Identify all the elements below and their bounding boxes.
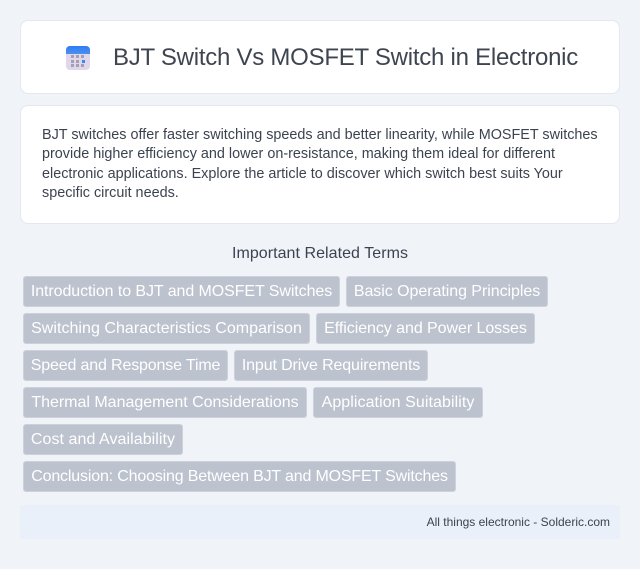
tag: basic operating principles bbox=[346, 276, 548, 307]
tag: switching characteristics: Switching Characteristics Comparison bbox=[31, 320, 302, 337]
tag: introduction: Introduction to BJT and MOSFET Switches bbox=[31, 283, 332, 300]
description text: BJT switches offer faster switching speeds and better linearity, while MOSFET switches bbox=[42, 127, 598, 143]
tag: thermal bbox=[23, 387, 307, 418]
tag: efficiency bbox=[316, 313, 535, 344]
tag: cost bbox=[23, 424, 183, 455]
icon: calendar bbox=[66, 46, 90, 70]
tag: conclusion bbox=[23, 461, 456, 492]
title: BJT Switch Vs MOSFET Switch in Electronic bbox=[113, 44, 578, 71]
tag: input drive: Input Drive Requirements bbox=[242, 357, 420, 374]
footer bar bbox=[20, 505, 620, 539]
tag: input drive bbox=[234, 350, 428, 381]
panel: description card bbox=[20, 105, 620, 224]
tag: switching characteristics bbox=[23, 313, 310, 344]
tag: basic operating principles: Basic Operating Principles bbox=[354, 283, 540, 300]
heading: important related terms: Important Related Terms bbox=[232, 245, 408, 262]
panel: header card bbox=[20, 20, 620, 94]
tag: thermal: Thermal Management Considerations bbox=[31, 394, 299, 411]
tag: introduction bbox=[23, 276, 340, 307]
footer text: All things electronic - Solderic.com bbox=[427, 515, 610, 529]
tag: conclusion: Conclusion: Choosing Between BJT and MOSFET Switches bbox=[31, 468, 448, 485]
tag: speed: Speed and Response Time bbox=[31, 357, 220, 374]
description text bbox=[42, 127, 598, 201]
description text: provide higher efficiency and lower on-resistance, making them ideal for different bbox=[42, 146, 555, 162]
description text: specific circuit needs. bbox=[42, 185, 179, 201]
tag: cost: Cost and Availability bbox=[31, 431, 175, 448]
tag list bbox=[23, 276, 548, 492]
tag: efficiency: Efficiency and Power Losses bbox=[324, 320, 527, 337]
description text: electronic applications. Explore the article to discover which switch best suits Your bbox=[42, 166, 563, 182]
tag: application bbox=[313, 387, 483, 418]
tag: application: Application Suitability bbox=[322, 394, 474, 411]
tag: speed bbox=[23, 350, 228, 381]
